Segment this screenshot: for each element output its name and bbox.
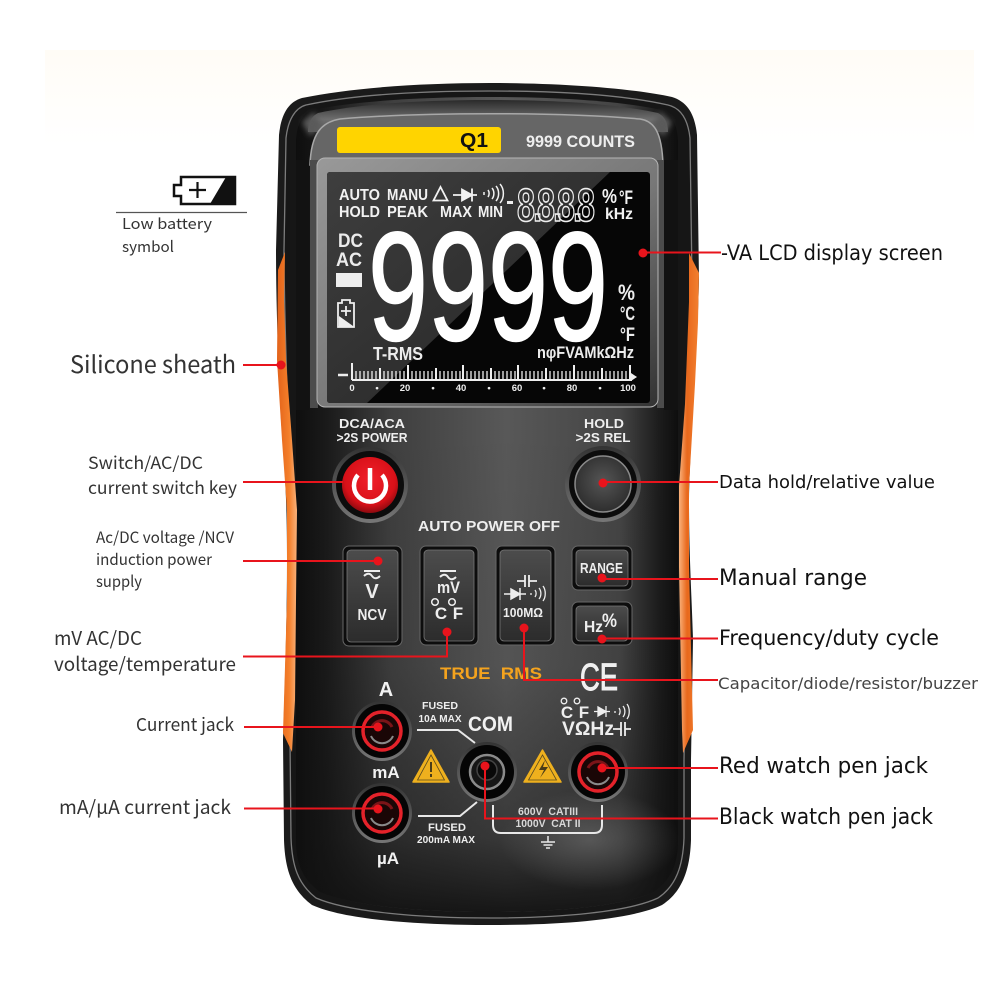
icon: diode: [504, 588, 526, 600]
scale numbers: 60: [512, 383, 522, 394]
V NCV key: V: [365, 581, 379, 603]
small units: kHz: [605, 206, 633, 223]
DC AC labels: DC: [338, 231, 363, 252]
leader dots: [276, 248, 648, 814]
key captions: [336, 416, 631, 445]
bar scale: [338, 363, 637, 381]
label: mV voltage temperature: [54, 624, 236, 677]
orange silicone sheath right: [679, 253, 699, 753]
label: mV voltage temperature: voltage/temperature: [54, 650, 236, 677]
corner highlight left: [302, 112, 322, 136]
category rating: 600V CATIII: [518, 806, 578, 818]
input symbols: F: [579, 703, 589, 722]
icon: buzzer: [484, 184, 503, 203]
LCD reflection: [327, 172, 610, 403]
power button: [332, 447, 408, 523]
fuse connector lines: [417, 730, 477, 816]
range key: RANGE: [580, 560, 623, 577]
auto power off: AUTO POWER OFF: [418, 518, 560, 535]
label: frequency: Frequency/duty cycle: [719, 626, 939, 650]
T-RMS label: T-RMS: [373, 344, 423, 364]
status labels: MIN: [478, 204, 503, 221]
capacitor diode key: [496, 546, 555, 645]
LCD screen: [317, 158, 658, 407]
counts text: 9999 COUNTS: [526, 132, 635, 151]
orange silicone sheath left: [277, 252, 297, 752]
corner highlight right: [652, 112, 672, 136]
icon: buzzer: [531, 586, 545, 601]
right units: [618, 280, 635, 346]
label: LCD screen: -VA LCD display screen: [721, 241, 943, 265]
DC AC labels: [336, 231, 363, 271]
small units: [602, 186, 633, 223]
icon: buzzer: [615, 704, 629, 719]
scale numbers: 0: [349, 383, 355, 394]
light spot lower right: [500, 790, 680, 890]
scale numbers: •: [487, 383, 491, 394]
small units: °F: [619, 188, 633, 209]
multimeter device: [276, 83, 699, 925]
jack: current: [352, 701, 412, 761]
key captions: DCA/ACA: [339, 416, 406, 431]
jack labels: µA: [377, 849, 399, 868]
label: low battery: Low battery: [122, 213, 212, 234]
status labels: AUTO: [339, 187, 380, 204]
icon: high voltage triangle: [524, 750, 561, 782]
label: capacitor: Capacitor/diode/resistor/buzzer: [718, 674, 978, 693]
category bracket: [493, 805, 602, 833]
label: red jack: Red watch pen jack: [719, 754, 928, 779]
icon: LCD battery: [338, 300, 354, 327]
true rms: TRUE RMS: [440, 664, 542, 683]
label: low battery: [122, 213, 212, 257]
dark sides beside display: [296, 160, 678, 410]
scale numbers: •: [375, 383, 379, 394]
status labels: MANU: [387, 187, 428, 204]
icon: capacitor: [613, 722, 631, 736]
scale numbers: •: [542, 383, 546, 394]
V NCV key: [343, 546, 402, 646]
input symbols: VΩHz: [562, 719, 614, 740]
input symbols: [561, 698, 631, 740]
scale numbers: 100: [620, 383, 636, 394]
plate sides beside display: [310, 160, 664, 408]
label: current jack: Current jack: [136, 711, 234, 737]
top plate: [310, 114, 663, 165]
key captions: >2S REL: [576, 430, 631, 445]
label: AC DC voltage: [96, 526, 234, 592]
small readout: 8.8.8.8: [517, 180, 595, 231]
small units: %: [602, 186, 617, 208]
right units: °C: [620, 304, 635, 325]
jack labels: mA: [372, 763, 400, 782]
frequency key: [572, 602, 632, 645]
icon: power symbol: [354, 468, 386, 502]
label: silicone sheath: Silicone sheath: [70, 345, 236, 380]
scale numbers: •: [431, 383, 435, 394]
negative sign: [336, 273, 362, 287]
frequency key: Hz: [584, 619, 603, 636]
scale numbers: 20: [400, 383, 410, 394]
label: switch key: current switch key: [88, 474, 237, 499]
label: switch key: [88, 449, 237, 499]
label: switch key: Switch/AC/DC: [88, 449, 203, 474]
icon: AC DC sign: [364, 571, 380, 578]
right units: %: [618, 280, 635, 305]
mV temperature key: [420, 546, 478, 645]
jack labels: A: [379, 679, 393, 701]
fused label bottom: 200mA MAX: [417, 834, 475, 846]
status labels: PEAK: [387, 204, 428, 221]
input symbols: C: [561, 703, 573, 722]
fused label top: FUSED: [422, 700, 458, 712]
icon: diode: [453, 188, 477, 202]
small readout sign: [507, 201, 513, 204]
body highlight edge: [284, 91, 692, 918]
fused label top: [418, 700, 462, 725]
icon: warning triangle: [413, 750, 449, 782]
mV temperature key: mV: [437, 578, 461, 597]
main face: [296, 97, 678, 912]
jack labels: [372, 679, 400, 868]
label: black jack: Black watch pen jack: [719, 805, 933, 830]
CE mark: CE: [580, 657, 618, 699]
fused label top: 10A MAX: [418, 713, 462, 725]
scale numbers: •: [598, 383, 602, 394]
right units: °F: [620, 325, 635, 346]
LCD bezel: [317, 158, 658, 407]
icon: low battery symbol: [174, 177, 235, 204]
fused label bottom: FUSED: [428, 822, 466, 834]
label: low battery: symbol: [122, 236, 174, 257]
COM label: COM: [468, 713, 513, 736]
capacitor diode key: 100MΩ: [503, 605, 543, 620]
jack: red input: [568, 742, 628, 802]
DC AC labels: AC: [336, 250, 362, 271]
unit row: nφFVAMkΩHz: [537, 343, 634, 362]
label: mV voltage temperature: mV AC/DC: [54, 624, 142, 651]
V NCV key: NCV: [358, 607, 387, 624]
status labels: HOLD: [339, 204, 380, 221]
icon: delta: [434, 187, 448, 200]
jack: milliamp: [352, 783, 412, 843]
mV temperature key: F: [453, 604, 463, 623]
range key: [572, 546, 632, 590]
icon: ground: [541, 836, 555, 848]
key captions: HOLD: [584, 416, 624, 431]
key captions: >2S POWER: [336, 430, 408, 445]
leader lines: [243, 252, 721, 818]
main reading: 9999: [368, 200, 608, 373]
body outer shell: [276, 83, 699, 925]
scale numbers: 40: [456, 383, 466, 394]
status labels: MAX: [440, 204, 472, 221]
scale numbers: [349, 383, 636, 394]
fused label bottom: [417, 822, 475, 846]
category rating: 1000V CAT II: [516, 818, 580, 830]
label: mA uA jack: mA/µA current jack: [59, 793, 232, 820]
icon: diode: [594, 706, 610, 717]
label: AC DC voltage: Ac/DC voltage /NCV: [96, 526, 234, 548]
icon: AC DC sign: [440, 571, 456, 579]
icon: capacitor: [517, 575, 537, 587]
label: AC DC voltage: supply: [96, 570, 142, 592]
lower face shading: [296, 420, 678, 912]
cream background band: [45, 50, 974, 145]
model name: Q1: [460, 130, 488, 152]
model plate: yellow label: [337, 127, 501, 153]
category rating: [516, 806, 580, 830]
scale numbers: 80: [567, 383, 577, 394]
low battery rule: [116, 212, 247, 214]
label: data hold: Data hold/relative value: [719, 472, 935, 493]
status labels: [339, 187, 503, 221]
label: manual range: Manual range: [719, 566, 867, 591]
hold button: [565, 446, 641, 522]
frequency key: %: [602, 611, 617, 632]
LCD black panel: [327, 172, 650, 403]
label: AC DC voltage: induction power: [96, 548, 213, 570]
jack: COM: [457, 742, 517, 802]
mV temperature key: C: [435, 604, 447, 623]
top band: [308, 100, 668, 132]
